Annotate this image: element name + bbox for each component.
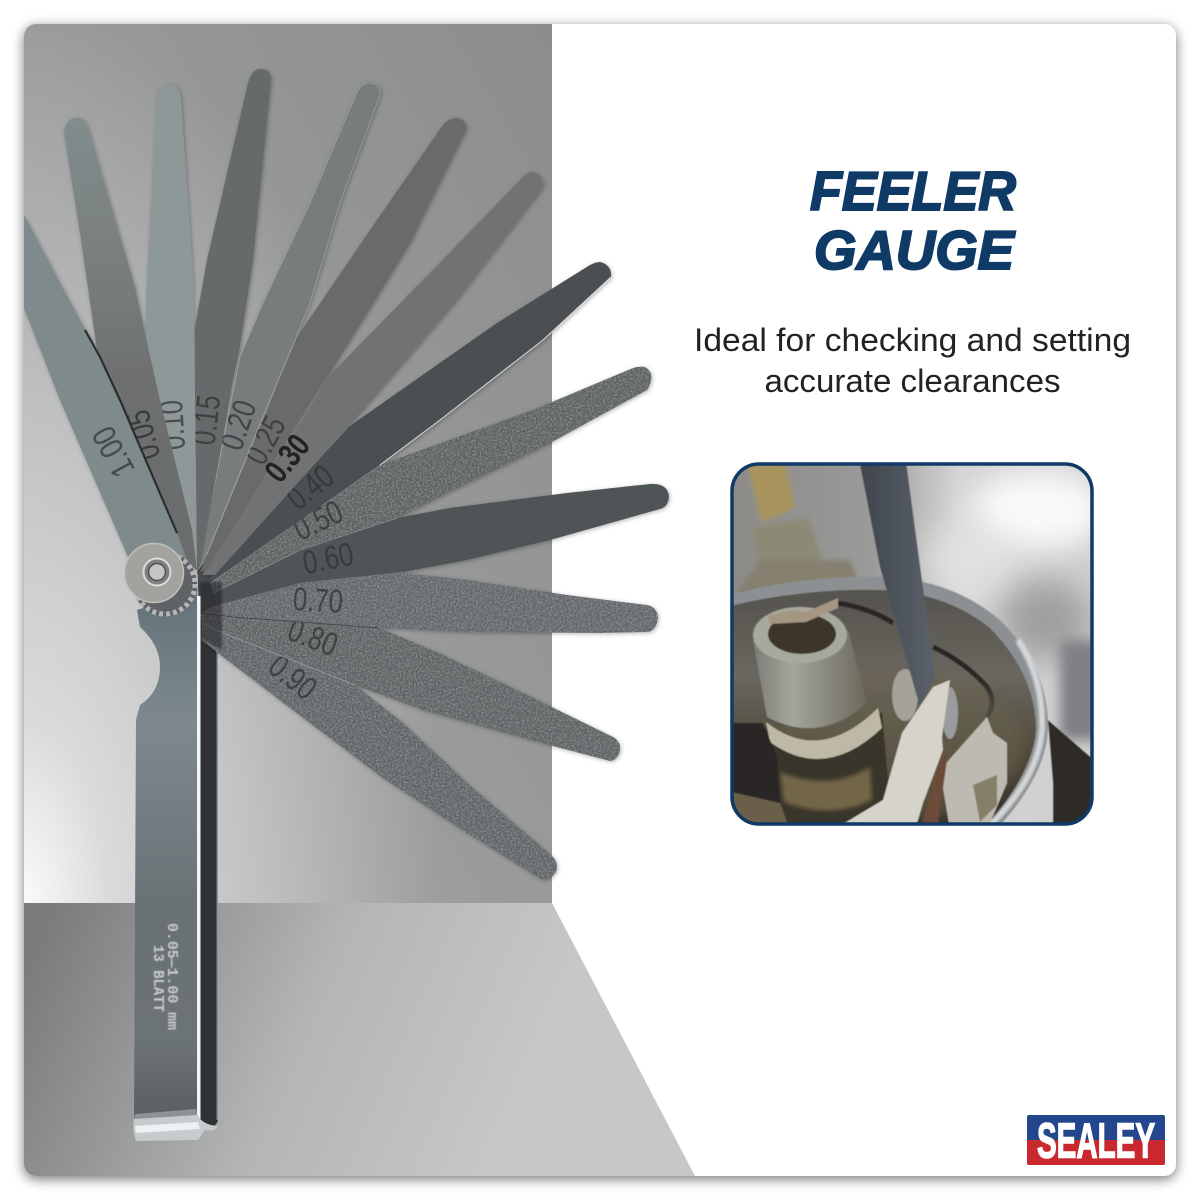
- fan of blades: [24, 69, 669, 879]
- dark deposits: [734, 722, 780, 802]
- blade 0.80: 0.80: [283, 611, 343, 663]
- gauge handle: [133, 590, 218, 1141]
- feeler gauge tool: [24, 69, 669, 1141]
- blade 0.05: [64, 118, 197, 570]
- description: [694, 322, 1131, 399]
- blade 0.15: 0.15: [185, 393, 227, 447]
- blade 1.00: [24, 215, 198, 605]
- handle back strip: [200, 640, 218, 1126]
- handle engraving: [154, 923, 178, 1030]
- knurled thumb nut: [124, 544, 197, 616]
- photo frame: [732, 464, 1092, 824]
- blade 0.90: 0.90: [262, 647, 324, 707]
- feeler blade: [858, 454, 935, 707]
- blade 1.00: 1.00: [84, 420, 142, 484]
- handle engraving: 13 BLATT: [149, 945, 166, 1012]
- contact set: [940, 717, 1007, 830]
- blade 0.25: [200, 118, 466, 572]
- title: FEELER: [810, 160, 1016, 222]
- breaker arm disc: [942, 687, 958, 739]
- handle engraving: 0.05—1.00 mm: [163, 923, 180, 1030]
- blade 0.10: 0.10: [152, 399, 192, 451]
- blade 0.60: 0.60: [299, 535, 357, 581]
- blade root shadow: [200, 582, 222, 650]
- studio backdrop: [24, 24, 695, 1176]
- blade 0.25: 0.25: [237, 410, 293, 470]
- description: Ideal for checking and setting: [694, 322, 1131, 358]
- blade 0.40: [204, 262, 611, 585]
- blade 0.60: [213, 484, 669, 605]
- brass terminal: [735, 464, 860, 600]
- terminal post: [753, 598, 888, 830]
- description: accurate clearances: [764, 363, 1060, 399]
- label 0.30: 0.30: [257, 427, 317, 489]
- breaker arm: [844, 680, 951, 822]
- blade 0.05: 0.05: [119, 406, 167, 464]
- blade 0.20: [198, 83, 380, 570]
- blade 0.90: [202, 623, 557, 879]
- blade root backing: [197, 555, 245, 652]
- blade 0.70: [200, 573, 658, 633]
- blade 0.10: [146, 85, 197, 570]
- blade 0.30: [202, 172, 543, 575]
- blade 0.80: [200, 611, 620, 761]
- blade 0.50: 0.50: [287, 492, 349, 548]
- blade 0.40: 0.40: [279, 457, 341, 517]
- title: GAUGE: [814, 219, 1016, 281]
- blade 0.20: 0.20: [213, 395, 263, 455]
- blade 0.50: [210, 367, 651, 593]
- wire: [837, 603, 992, 717]
- photo: gauge setting a contact-breaker gap: [730, 462, 1094, 826]
- metal cup: [722, 577, 1048, 836]
- pivot washer: [892, 669, 918, 721]
- title: [810, 160, 1016, 281]
- blade 0.70: 0.70: [292, 580, 344, 620]
- blade 0.15: [185, 69, 271, 575]
- cup floor: [775, 670, 1025, 820]
